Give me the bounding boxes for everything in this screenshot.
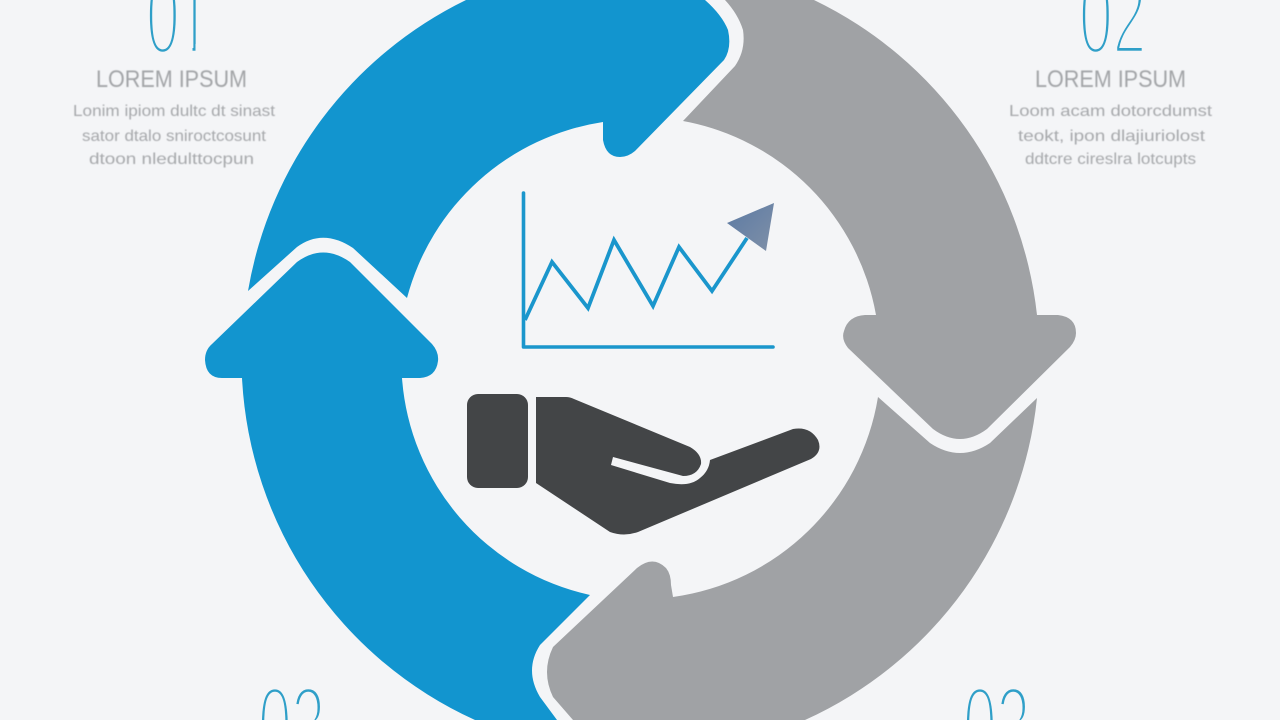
- heading 02: LOREM IPSUM: [1035, 66, 1186, 93]
- body text 01: [73, 103, 276, 168]
- body text 02: [1009, 103, 1213, 168]
- arrow: bottom-left blue segment: [205, 252, 590, 720]
- step 02 block: [1009, 0, 1213, 168]
- body text 02: teokt, ipon dlajiuriolost: [1018, 128, 1206, 145]
- chart: growth line with arrow: [524, 193, 774, 347]
- chart trend line: [525, 238, 747, 320]
- body text 01: Lonim ipiom dultc dt sinast: [73, 103, 276, 120]
- arrow: bottom-right gray segment: [547, 397, 1037, 720]
- chart axes: [524, 193, 773, 347]
- arrow: top-right gray segment: [683, 0, 1076, 439]
- chart arrowhead: [727, 203, 774, 251]
- heading 01: LOREM IPSUM: [96, 66, 247, 93]
- hand palm: [536, 397, 819, 534]
- body text 01: dtoon nledulttocpun: [89, 151, 254, 168]
- arrow: top-left blue segment: [248, 0, 729, 298]
- step 01 block: [73, 0, 276, 168]
- icon: open hand: [467, 394, 819, 534]
- hand cuff: [467, 394, 528, 488]
- body text 02: Loom acam dotorcdumst: [1009, 103, 1213, 120]
- body text 01: sator dtalo sniroctcosunt: [82, 128, 267, 145]
- body text 02: ddtcre cireslra lotcupts: [1025, 151, 1196, 168]
